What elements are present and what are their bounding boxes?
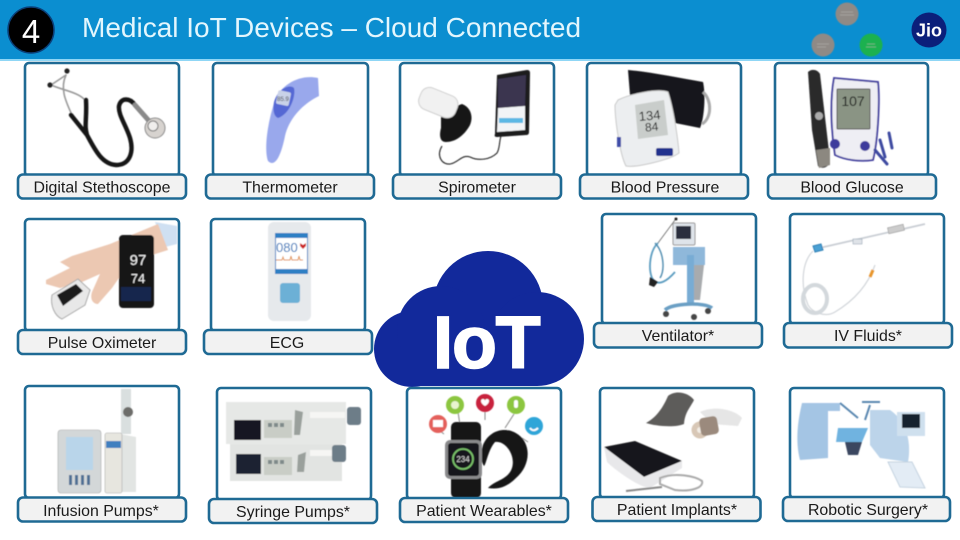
label (204, 330, 372, 354)
label (592, 497, 760, 521)
panel: ECG (204, 219, 372, 354)
icon: blood pressure monitor: 134 (638, 107, 661, 124)
panel: Digital Stethoscope (18, 63, 186, 198)
header bar (0, 0, 960, 61)
panel: Spirometer (393, 63, 561, 198)
label (206, 174, 374, 198)
icon: pulse oximeter with phone: 97 (130, 252, 146, 269)
label (768, 174, 936, 198)
Jio logo: Jio (916, 20, 942, 40)
icon: glucose meter (808, 70, 892, 168)
icon: ECG monitor (268, 222, 311, 321)
panel: Syringe Pumps (209, 388, 377, 523)
label: Syringe Pumps* (236, 504, 350, 521)
icon: pulse oximeter with phone (46, 222, 177, 319)
decorative network nodes (812, 2, 882, 56)
Jio logo (912, 12, 946, 48)
icon: thermometer: 85.9 (277, 97, 289, 103)
slide number badge (8, 7, 54, 53)
icon: infusion pump (58, 389, 136, 493)
label (784, 323, 952, 348)
label: Blood Pressure (611, 180, 719, 196)
label (18, 174, 186, 198)
icon: stethoscope (47, 68, 165, 165)
label (400, 498, 568, 522)
label (18, 330, 186, 354)
label (18, 498, 186, 522)
icon: surgical robot (797, 402, 925, 488)
label: Thermometer (242, 180, 338, 196)
panel: IV Fluids (784, 214, 952, 348)
label: Patient Wearables* (416, 503, 552, 520)
label (393, 174, 561, 198)
icon: ventilator (649, 218, 712, 320)
label (580, 174, 748, 198)
panel: Patient Implants (592, 388, 760, 521)
label: IV Fluids* (834, 328, 902, 345)
icon: smartwatch, band and app bubbles: 234 (456, 455, 470, 464)
slide number badge: 4 (22, 13, 40, 50)
title: Medical IoT Devices – Cloud Connected (82, 12, 581, 43)
icon: IoT cloud (374, 251, 584, 387)
icon: spirometer with phone (416, 70, 530, 164)
icon: implant devices (604, 393, 742, 491)
icon: thermometer (266, 77, 319, 163)
label: Digital Stethoscope (34, 180, 171, 196)
icon: smartwatch, band and app bubbles (429, 394, 543, 498)
icon: blood pressure monitor: 84 (644, 119, 659, 135)
icon: syringe pumps (226, 402, 361, 481)
panel: Infusion Pumps (18, 386, 186, 522)
icon: blood pressure monitor (615, 70, 710, 166)
label: Patient Implants* (617, 502, 737, 519)
label: Robotic Surgery* (808, 502, 928, 519)
panel: Blood Glucose (768, 63, 936, 198)
panel: Patient Wearables (400, 388, 568, 522)
panel: Thermometer (206, 63, 374, 198)
panel: Ventilator (594, 214, 762, 348)
panel: Robotic Surgery (783, 388, 950, 521)
panel: Blood Pressure (580, 63, 748, 198)
label: Pulse Oximeter (48, 335, 157, 352)
label (594, 323, 762, 348)
icon: glucose meter: 107 (841, 93, 865, 109)
panel: Pulse Oximeter (18, 219, 186, 354)
label: Spirometer (438, 180, 517, 196)
label: Blood Glucose (800, 180, 904, 196)
icon: pulse oximeter with phone: 74 (131, 271, 145, 286)
icon: ECG monitor: 080 (276, 240, 298, 255)
label: Ventilator* (642, 328, 714, 345)
label: Infusion Pumps* (43, 503, 159, 520)
label (783, 497, 950, 521)
label (209, 499, 377, 523)
label: ECG (270, 335, 304, 352)
icon: IV line (803, 224, 925, 314)
IoT text: IoT (433, 301, 541, 384)
